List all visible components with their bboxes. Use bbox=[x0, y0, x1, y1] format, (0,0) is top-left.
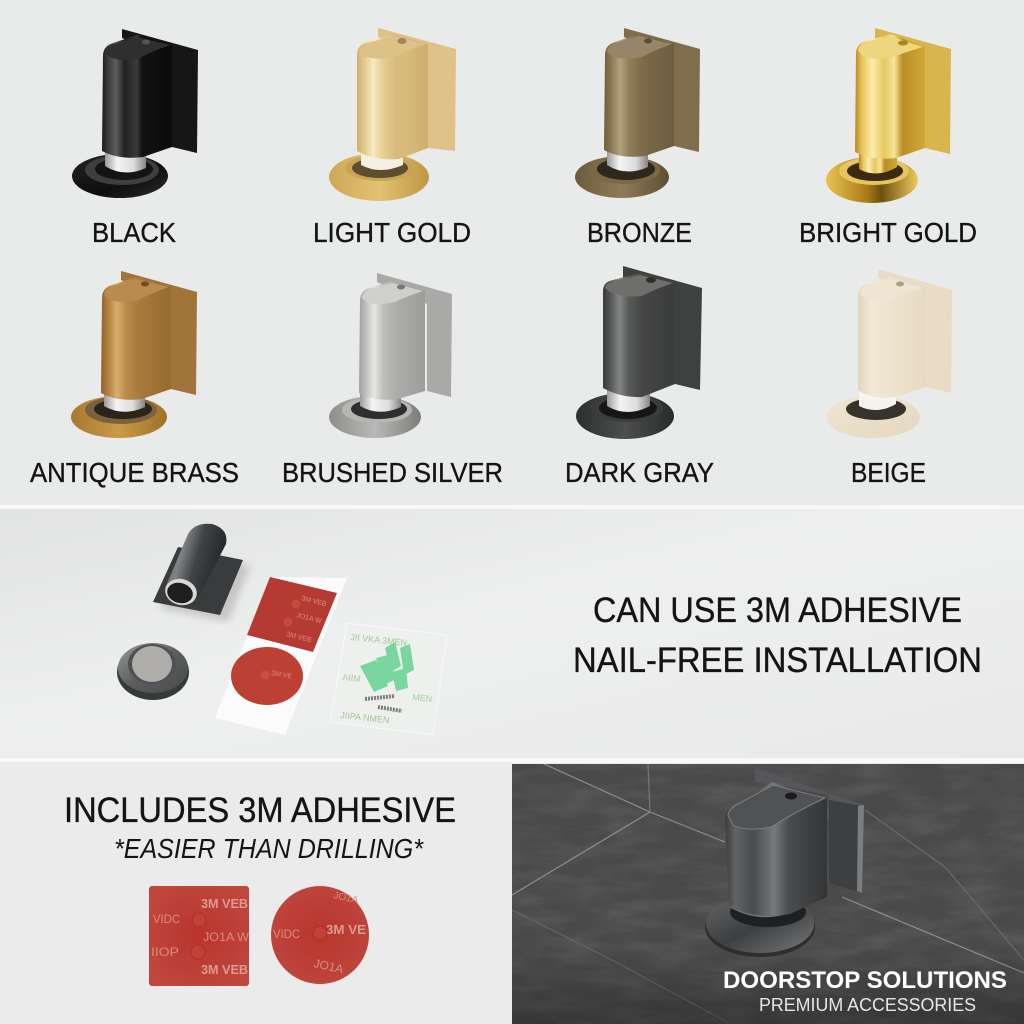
round adhesive pad: 3M VE bbox=[326, 922, 366, 937]
photo: screw and wall-plug bag: AIIM bbox=[342, 672, 361, 684]
photo: adhesive backing sheet bbox=[215, 577, 347, 735]
brand name: DOORSTOP SOLUTIONS bbox=[723, 967, 1007, 994]
product: bright gold bbox=[826, 28, 951, 203]
square adhesive pad bbox=[149, 886, 250, 986]
tagline: PREMIUM ACCESSORIES bbox=[759, 995, 976, 1015]
product: black bbox=[72, 29, 198, 198]
installed door stop bbox=[705, 768, 864, 957]
square adhesive pad: 3M VEB bbox=[201, 896, 248, 911]
square adhesive pad: JO1A W bbox=[203, 930, 250, 944]
panel: included adhesive bbox=[0, 762, 512, 1024]
subheading: *EASIER THAN DRILLING* bbox=[114, 833, 424, 864]
label: beige: BEIGE bbox=[851, 457, 926, 488]
product: bronze bbox=[575, 28, 700, 198]
red square adhesive pad: JO1A W bbox=[296, 612, 323, 625]
message line 1: CAN USE 3M ADHESIVE bbox=[593, 591, 962, 630]
red square adhesive pad: 3M VEB bbox=[301, 595, 327, 608]
photo: screw and wall-plug bag: JII VKA 3MEN bbox=[350, 632, 408, 648]
square adhesive pad: IIOP bbox=[151, 945, 179, 959]
square adhesive pad: VIDC bbox=[153, 912, 180, 926]
label: dark gray: DARK GRAY bbox=[565, 457, 714, 488]
label: light gold: LIGHT GOLD bbox=[313, 217, 471, 248]
product: brushed silver bbox=[329, 273, 452, 438]
label: antique brass: ANTIQUE BRASS bbox=[30, 457, 239, 488]
round adhesive pad: JO1A bbox=[312, 956, 345, 976]
product: beige bbox=[826, 269, 952, 438]
red square adhesive pad bbox=[247, 577, 337, 652]
label: black: BLACK bbox=[92, 217, 176, 248]
round adhesive pad bbox=[271, 886, 369, 984]
photo: screw and wall-plug bag: MEN bbox=[412, 692, 433, 704]
photo: strike plate bbox=[117, 643, 189, 700]
round adhesive pad: JO1A bbox=[332, 890, 359, 906]
red square adhesive pad: 3M VEB bbox=[286, 631, 312, 644]
photo: screw and wall-plug bag: JIIPA NMEN bbox=[340, 710, 390, 725]
square adhesive pad: 3M VEB bbox=[201, 962, 248, 977]
product: light gold bbox=[329, 28, 456, 201]
panel: kit contents and nail-free message bbox=[0, 505, 1024, 763]
red round adhesive pad: 3M VE bbox=[271, 670, 293, 681]
product: antique brass bbox=[71, 271, 197, 438]
panel: installed photo bbox=[512, 763, 1024, 1024]
product: dark gray bbox=[576, 266, 702, 439]
label: bronze: BRONZE bbox=[587, 217, 692, 248]
photo: screw and wall-plug bag bbox=[330, 623, 447, 735]
red round adhesive pad bbox=[231, 647, 303, 705]
round adhesive pad: VIDC bbox=[273, 927, 300, 941]
heading: INCLUDES 3M ADHESIVE bbox=[64, 791, 456, 830]
message line 2: NAIL-FREE INSTALLATION bbox=[573, 641, 982, 680]
label: brushed silver: BRUSHED SILVER bbox=[282, 457, 503, 488]
panel: colour swatches bbox=[30, 28, 977, 488]
photo: magnetic stop bbox=[153, 524, 250, 622]
label: bright gold: BRIGHT GOLD bbox=[799, 217, 977, 248]
